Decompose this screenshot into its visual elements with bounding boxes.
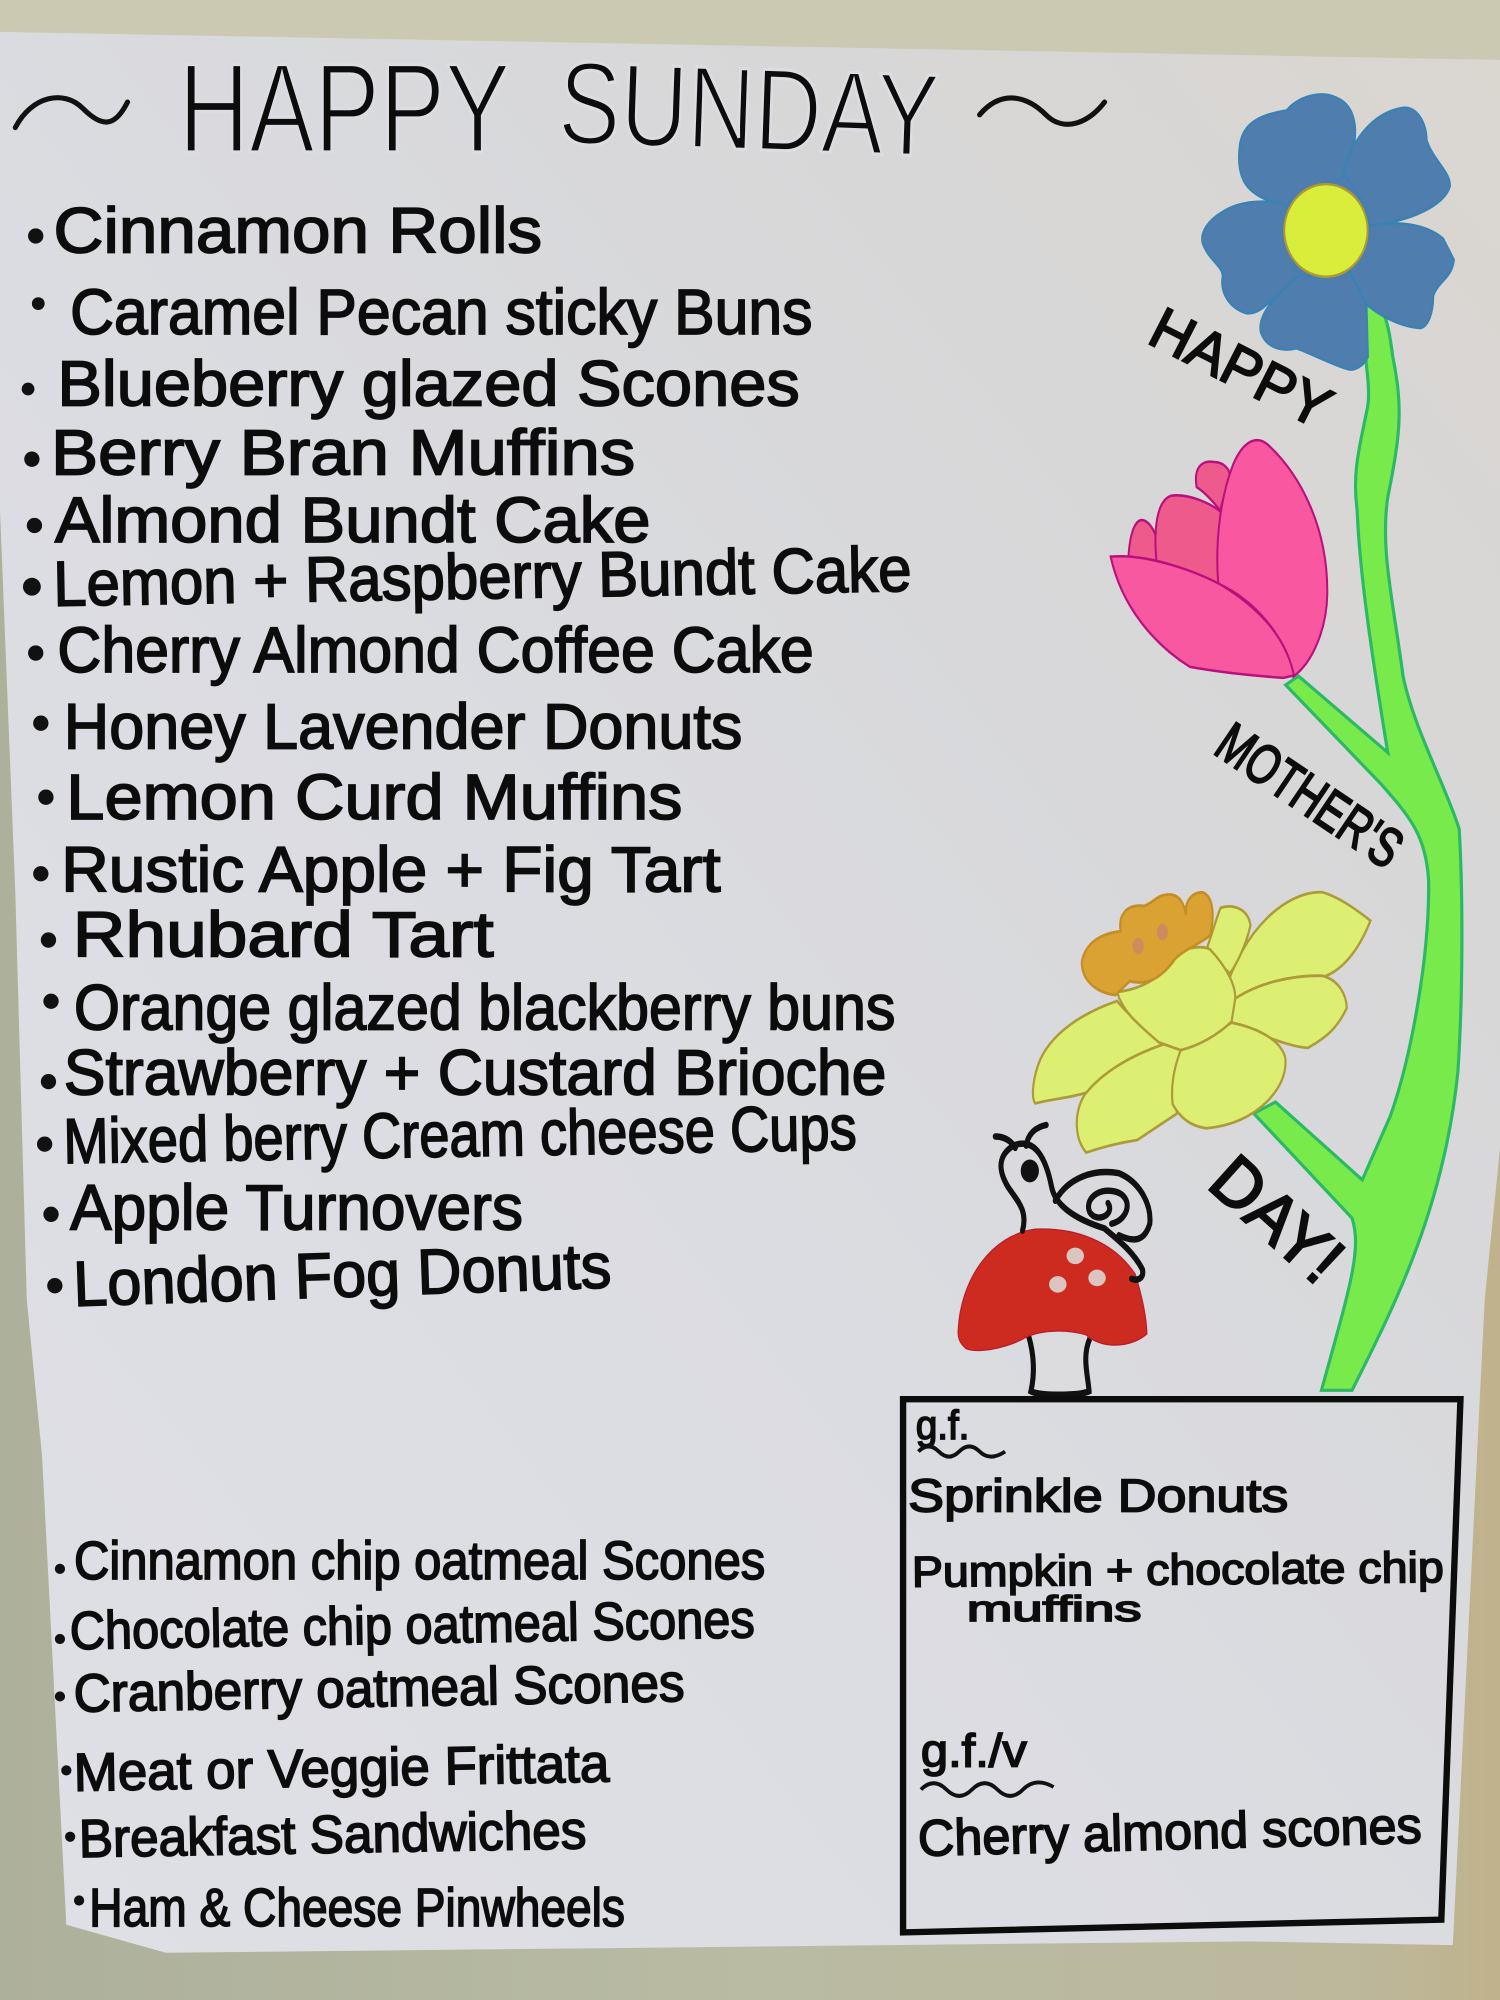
heading: Day!: DAY! [1195, 1140, 1359, 1298]
item: Rhubard Tart: Rhubard Tart [73, 899, 494, 971]
item: Cinnamon Chip Oatmeal Scones: Cinnamon chip oatmeal Scones [74, 1532, 765, 1591]
item: Meat or Veggie Frittata: Meat or Veggie Frittata [73, 1734, 610, 1803]
icon: yellow daffodil [1033, 892, 1370, 1153]
title: SUNDAY [557, 37, 941, 181]
item: Orange Glazed Blackberry Buns: Orange glazed blackberry buns [74, 971, 895, 1043]
item: Chocolate Chip Oatmeal Scones: Chocolate chip oatmeal Scones [69, 1590, 755, 1661]
panel: main pastry list [22, 195, 912, 1320]
item: Strawberry + Custard Brioche: Strawberry + Custard Brioche [64, 1036, 886, 1108]
item: Mixed Berry Cream Cheese Cups: Mixed berry Cream cheese Cups [63, 1091, 857, 1177]
icon: blue flower [1202, 94, 1454, 370]
title: HAPPY [179, 38, 510, 180]
label: g.f./v [921, 1725, 1054, 1796]
icon: pink tulip [1111, 440, 1327, 678]
panel: savoury and scones list [55, 1532, 765, 1938]
label: g.f.: g.f. [916, 1402, 969, 1448]
item: Caramel Pecan Sticky Buns: Caramel Pecan sticky Buns [70, 276, 812, 348]
icon: snail [995, 1125, 1150, 1280]
item: Almond Bundt Cake: Almond Bundt Cake [55, 484, 651, 556]
item: Berry Bran Muffins: Berry Bran Muffins [51, 416, 635, 488]
item: London Fog Donuts: London Fog Donuts [72, 1229, 612, 1320]
item: Breakfast Sandwiches: Breakfast Sandwiches [78, 1801, 587, 1869]
heading: Mother's: MOTHER'S [1205, 710, 1415, 880]
item: Cinnamon Rolls: Cinnamon Rolls [54, 195, 542, 267]
item: Rustic Apple + Fig Tart: Rustic Apple + Fig Tart [61, 834, 721, 906]
item: Ham and Cheese Pinwheels: Ham & Cheese Pinwheels [89, 1879, 625, 1938]
label: g.f./v: g.f./v [921, 1725, 1027, 1777]
panel: gluten-free box [903, 1399, 1460, 1932]
item: Pumpkin + chocolate chip muffins: muffins [967, 1589, 1142, 1629]
item: Lemon Curd Muffins: Lemon Curd Muffins [66, 761, 682, 833]
item: Lemon + Raspberry Bundt Cake: Lemon + Raspberry Bundt Cake [53, 533, 912, 620]
item: Pumpkin + chocolate chip muffins: Pumpkin + chocolate chip [912, 1544, 1444, 1597]
item: Cherry Almond Coffee Cake: Cherry Almond Coffee Cake [57, 614, 814, 686]
label: g.f. [916, 1402, 1005, 1457]
title [15, 37, 1105, 181]
item: Cherry almond scones: Cherry almond scones [917, 1797, 1422, 1867]
heading: Happy: HAPPY [1140, 296, 1342, 441]
item: Cranberry Oatmeal Scones: Cranberry oatmeal Scones [73, 1654, 685, 1724]
item: Pumpkin + chocolate chip muffins [912, 1544, 1444, 1629]
item: Honey Lavender Donuts: Honey Lavender Donuts [64, 691, 742, 763]
green flower stem [1254, 306, 1462, 1390]
icon: red mushroom [958, 1229, 1147, 1395]
item: Blueberry Glazed Scones: Blueberry glazed Scones [57, 348, 800, 420]
item: Sprinkle Donuts: Sprinkle Donuts [908, 1469, 1288, 1521]
item: Apple Turnovers: Apple Turnovers [70, 1172, 523, 1244]
